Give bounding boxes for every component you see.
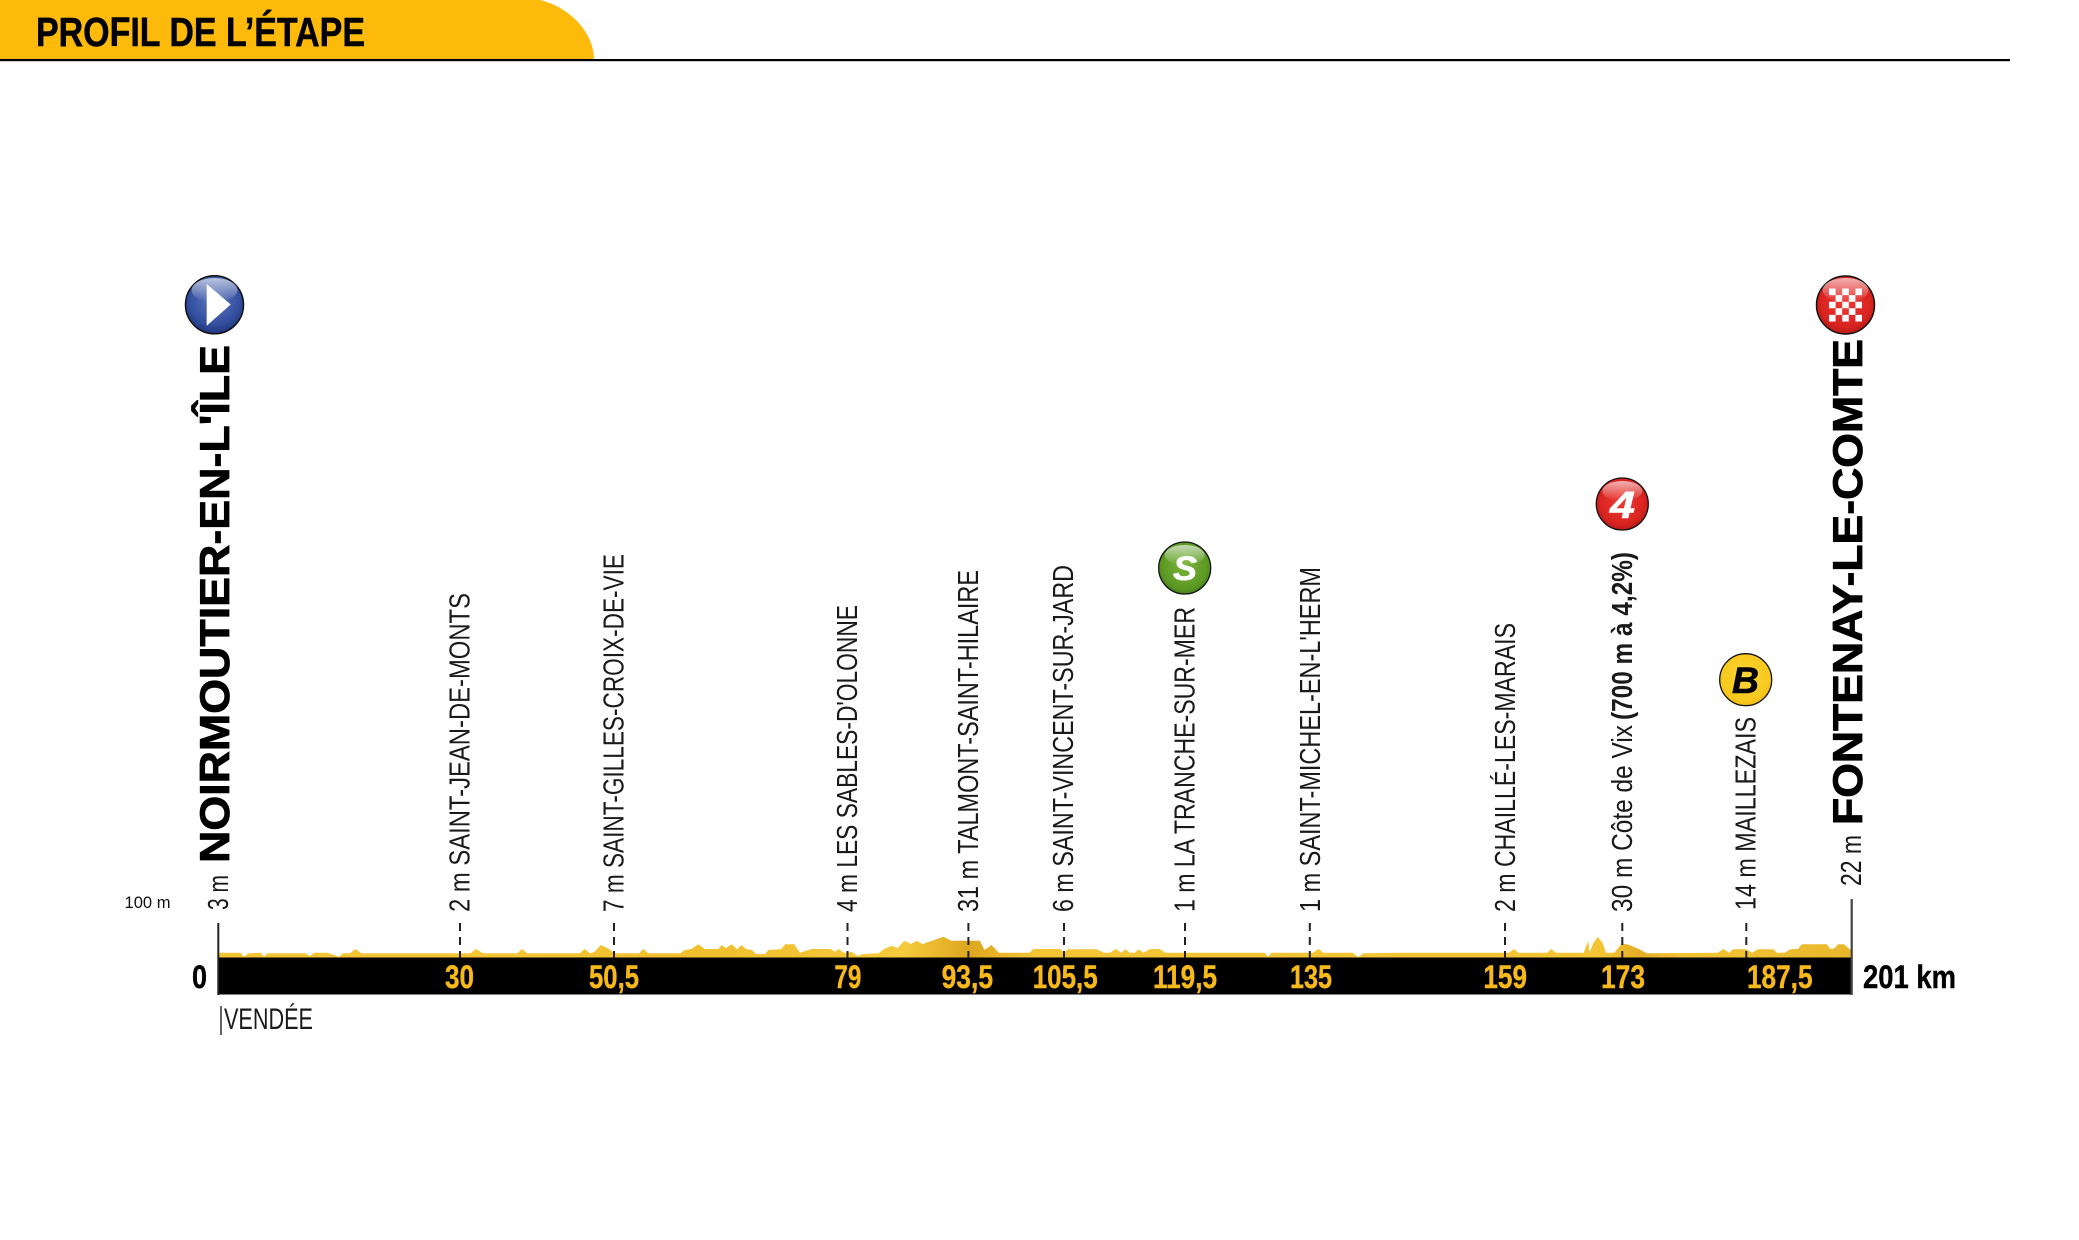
icon: finish checkered flag [1816, 276, 1874, 334]
finish town altitude: 22 m [1836, 835, 1868, 886]
distance markers: 93,5 [942, 959, 993, 995]
distance markers: 135 [1290, 959, 1332, 995]
waypoint: Saint-Jean-de-Monts: 2 m SAINT-JEAN-DE-MONTS [444, 593, 476, 912]
total distance: 201 km [1863, 959, 1956, 995]
distance markers: 119,5 [1153, 959, 1217, 995]
waypoint: Maillezais: 14 m MAILLEZAIS [1730, 717, 1762, 910]
altitude scale label: 100 m [124, 893, 170, 912]
icon: bonus point B [1720, 654, 1772, 706]
icon: start arrow [186, 276, 244, 334]
finish town name: FONTENAY-LE-COMTE [1824, 339, 1871, 825]
distance markers: 50,5 [589, 959, 639, 995]
start axis line [217, 923, 219, 995]
black distance bar [218, 958, 1852, 994]
waypoint: Saint-Michel-en-l'Herm: 1 m SAINT-MICHEL-EN-L'HERM [1295, 567, 1327, 912]
waypoint: Côte de Vix climb: (700 m à 4,2%) [1607, 552, 1639, 720]
distance markers: 159 [1483, 959, 1527, 995]
icon: bonus point B: B [1732, 660, 1759, 701]
start town name: NOIRMOUTIER-EN-L'ÎLE [190, 345, 238, 863]
header: profil de l'étape [0, 0, 2010, 61]
waypoint: La Tranche-sur-Mer: 1 m LA TRANCHE-SUR-MER [1170, 607, 1202, 912]
distance markers: 173 [1601, 959, 1645, 995]
title: PROFIL DE L’ÉTAPE [36, 9, 365, 55]
distance markers [445, 959, 1812, 995]
distance markers: 187,5 [1747, 959, 1812, 995]
region label: Vendée: VENDÉE [224, 1003, 313, 1036]
icon: intermediate sprint S [1159, 542, 1211, 594]
zero altitude label: 0 [192, 959, 207, 995]
waypoint: Côte de Vix climb: 30 m Côte de Vix [1607, 725, 1639, 912]
distance markers: 105,5 [1033, 959, 1098, 995]
icon: category 4 climb [1596, 478, 1648, 530]
distance markers: 79 [834, 959, 861, 995]
waypoint: Saint-Gilles-Croix-de-Vie: 7 m SAINT-GILLES-CROIX-DE-VIE [598, 554, 630, 912]
start town altitude: 3 m [203, 875, 235, 910]
finish axis line [1851, 899, 1853, 995]
waypoint: Chaillé-les-Marais: 2 m CHAILLÉ-LES-MARAIS [1489, 623, 1522, 912]
icon: intermediate sprint S: S [1173, 550, 1197, 588]
waypoint: Talmont-Saint-Hilaire: 31 m TALMONT-SAINT-HILAIRE [953, 570, 985, 912]
waypoint: Côte de Vix climb [1607, 552, 1639, 912]
distance markers: 30 [445, 959, 474, 995]
waypoint: Les Sables-d'Olonne: 4 m LES SABLES-D'OLONNE [832, 605, 864, 912]
elevation profile [218, 937, 1851, 958]
dashed tick markers [460, 923, 1746, 958]
icon: category 4 climb: 4 [1609, 485, 1635, 527]
waypoint: Saint-Vincent-sur-Jard: 6 m SAINT-VINCENT-SUR-JARD [1048, 565, 1080, 912]
